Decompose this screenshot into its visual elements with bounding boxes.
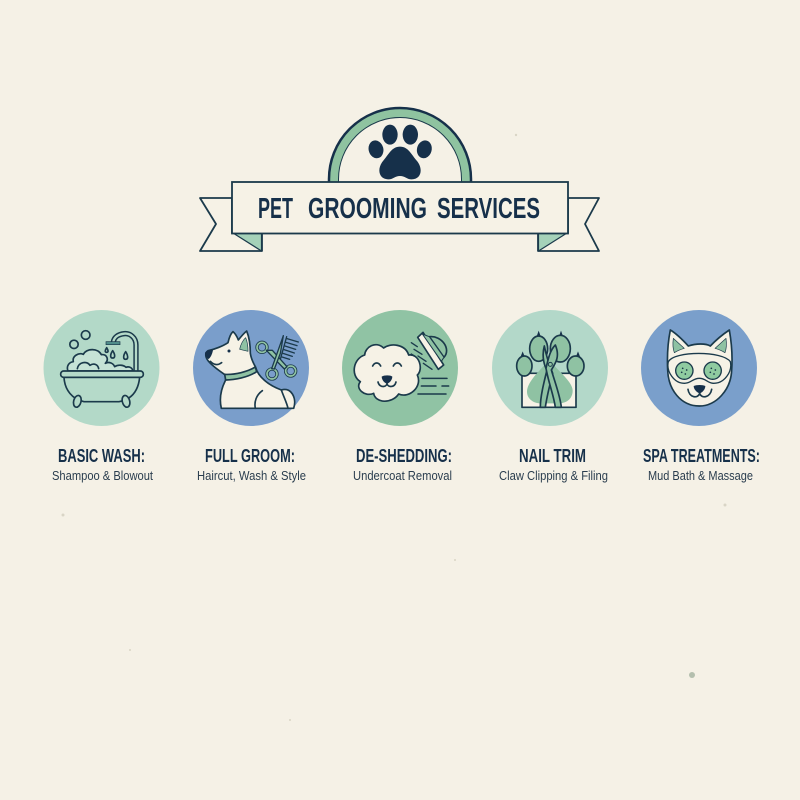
label (353, 446, 452, 483)
label: DE-SHEDDING: (356, 446, 452, 466)
circle background (44, 310, 160, 426)
service: de-shedding (342, 310, 458, 483)
ribbon tail: left (200, 198, 262, 251)
label: Undercoat Removal (353, 468, 452, 483)
icon: paw print (367, 125, 434, 179)
circle background (342, 310, 458, 426)
service: basic wash (44, 310, 160, 483)
title (258, 193, 540, 225)
label: Shampoo & Blowout (52, 468, 153, 483)
label: Haircut, Wash & Style (197, 468, 306, 483)
label (499, 446, 608, 483)
circle background (641, 310, 757, 426)
ribbon tail: right (538, 198, 599, 251)
title: SERVICES (437, 193, 540, 225)
header: title banner with paw arch (200, 108, 599, 251)
circle background (193, 310, 309, 426)
label (52, 446, 153, 483)
title: PET (258, 193, 293, 225)
icon: fluffy dog and brush (354, 332, 449, 401)
service: spa treatments (641, 310, 760, 483)
label: NAIL TRIM (519, 446, 586, 466)
service: full groom (193, 310, 309, 483)
label: BASIC WASH: (58, 446, 145, 466)
icon: paw and clippers (517, 331, 584, 407)
arch (329, 108, 471, 182)
ribbon band (232, 182, 568, 234)
label (643, 446, 760, 483)
label: FULL GROOM: (205, 446, 295, 466)
label: Mud Bath & Massage (648, 468, 753, 483)
label (197, 446, 306, 483)
icon: bathtub (61, 331, 143, 408)
title: GROOMING (308, 193, 427, 225)
label: Claw Clipping & Filing (499, 468, 608, 483)
icon: cat with cucumber eyes (667, 330, 732, 406)
service: nail trim (492, 310, 608, 483)
icon: dog with scissors and comb (205, 331, 298, 408)
circle background (492, 310, 608, 426)
